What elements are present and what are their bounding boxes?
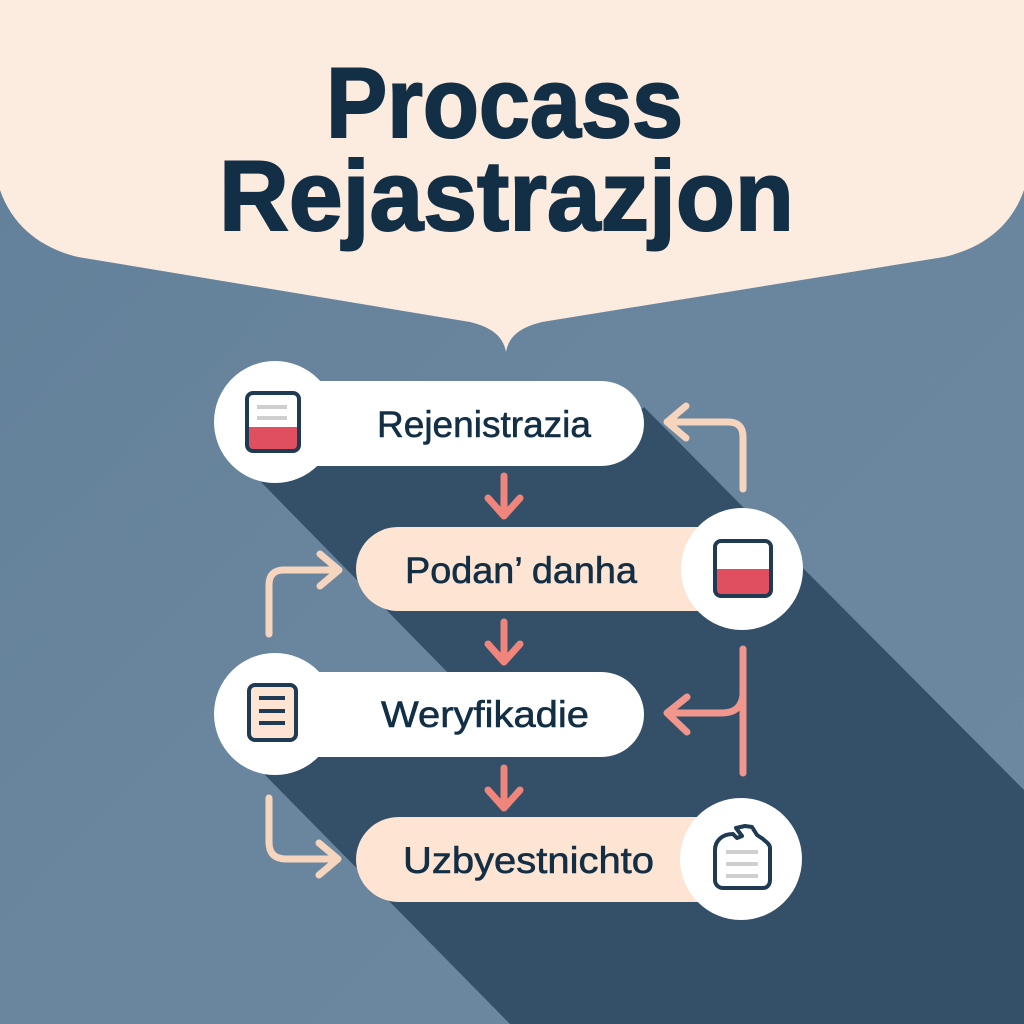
icon: form with red band (247, 393, 299, 451)
title: Rejastrazjon (219, 140, 794, 251)
arrow: step 3 to step 4 (488, 768, 520, 808)
icon: torn clipboard (715, 826, 770, 888)
title (219, 47, 794, 251)
icon: document with lines (249, 685, 296, 740)
step 4: Uzbyestnichto (356, 798, 802, 920)
arrow: loop into step 2 (269, 554, 339, 634)
arrow: branch back to step 3 (667, 649, 743, 773)
diagonal long shadow (261, 407, 1024, 1024)
icon: flag card (715, 541, 771, 596)
arrow: return to step 1 (667, 406, 743, 489)
label: Rejenistrazia (377, 404, 591, 445)
arrow: step 2 to step 3 (488, 622, 520, 662)
title banner (0, 0, 1024, 352)
label: Uzbyestnichto (403, 840, 654, 881)
step 3: Weryfikadie (214, 653, 644, 775)
step 1: Rejenistrazia (214, 361, 644, 483)
arrow: step 1 to step 2 (488, 476, 520, 516)
arrow: step 3 side path to step 4 (269, 798, 338, 875)
step 2: Podan' danha (356, 508, 803, 630)
title: Procass (326, 47, 683, 158)
label: Weryfikadie (381, 694, 589, 735)
label: Podan’ danha (405, 550, 637, 591)
